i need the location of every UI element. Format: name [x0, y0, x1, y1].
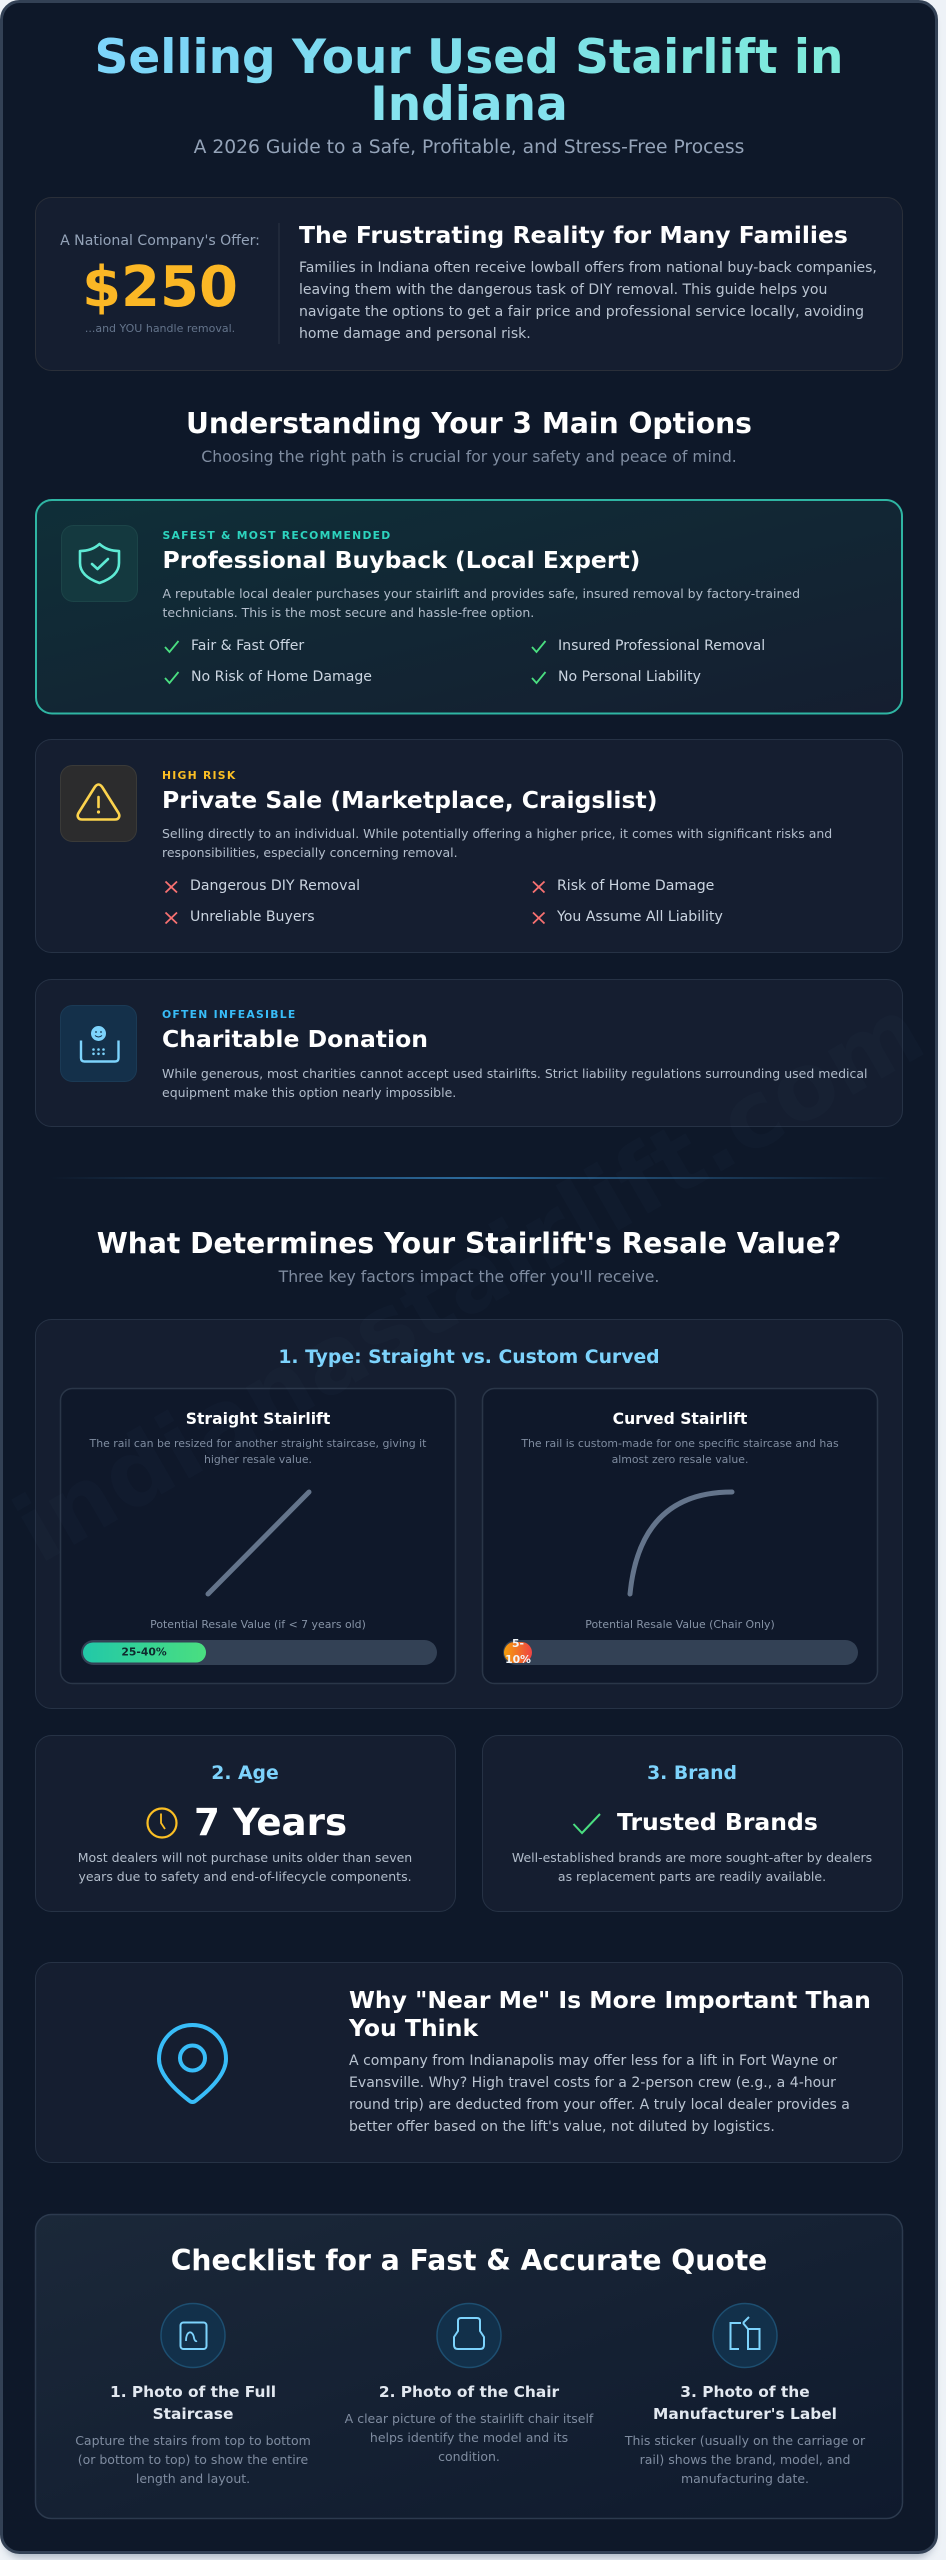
- panel: charitable donation: equipment make this option nearly impossible.: [162, 1085, 456, 1100]
- curved rail: [630, 1492, 732, 1594]
- heading: resale value: Three key factors impact the offer you'll receive.: [278, 1267, 659, 1286]
- checklist item 3: [624, 2304, 866, 2486]
- checklist item 1: (or bottom to top) to show the entire: [78, 2452, 309, 2467]
- heading: resale value: [97, 1227, 841, 1286]
- panel: professional buyback: SAFEST & MOST RECOMMENDED: [162, 529, 392, 542]
- intro body: Families in Indiana often receive lowball offers from national buy-back companies,: [299, 260, 877, 276]
- card: curved stairlift: [482, 1388, 878, 1684]
- checklist item 3: This sticker (usually on the carriage or: [624, 2433, 866, 2448]
- panel: private sale: Private Sale (Marketplace, Craigslist): [162, 786, 657, 814]
- straight rail: [208, 1492, 309, 1594]
- panel: checklist: Checklist for a Fast & Accurate Quote: [171, 2244, 767, 2277]
- panel: charitable donation: While generous, most charities cannot accept used stairlifts. Strict liability regulations surrounding used medical: [162, 1066, 868, 1081]
- checklist item 3: Manufacturer's Label: [653, 2405, 837, 2423]
- panel: professional buyback: A reputable local dealer purchases your stairlift and provides safe, insured removal by factory-trained: [162, 586, 800, 601]
- panel: age: 2. Age: [211, 1763, 279, 1784]
- intro heading: The Frustrating Reality for Many Families: [299, 221, 848, 249]
- checklist item 2: 2. Photo of the Chair: [379, 2383, 560, 2401]
- checklist item 2: A clear picture of the stairlift chair itself: [345, 2411, 594, 2426]
- checklist item 1: length and layout.: [136, 2471, 250, 2486]
- title: Selling Your Used Stairlift in: [95, 30, 843, 85]
- title: Indiana: [370, 77, 568, 132]
- value bar 25-40%: 25-40%: [121, 1646, 167, 1658]
- panel: near me: You Think: [348, 2014, 479, 2042]
- checklist item 2: [345, 2304, 594, 2464]
- national offer: ...and YOU handle removal.: [85, 322, 235, 335]
- heading: options: [186, 407, 752, 466]
- intro body: leaving them with the dangerous task of DIY removal. This guide helps you: [299, 282, 827, 298]
- checklist item 1: [75, 2304, 311, 2486]
- icon: shield: [62, 526, 138, 602]
- icon: label photo: [713, 2304, 777, 2368]
- intro body: [299, 260, 877, 342]
- risks list: Dangerous DIY Removal: [190, 878, 360, 894]
- intro body: navigate the options to get a fair price and professional service locally, avoiding: [299, 304, 864, 320]
- icon: donation: [60, 1006, 136, 1082]
- checklist item 2: helps identify the model and its: [370, 2430, 568, 2445]
- panel: age: Most dealers will not purchase units older than seven: [78, 1850, 412, 1865]
- value bar 5-10%: [503, 1637, 858, 1666]
- panel: brand: 3. Brand: [647, 1763, 737, 1784]
- panel: professional buyback: technicians. This is the most secure and hassle-free option.: [162, 605, 534, 620]
- icon: warning: [60, 766, 136, 842]
- panel: age: years due to safety and end-of-lifecycle components.: [78, 1869, 412, 1884]
- panel: brand: as replacement parts are readily available.: [558, 1869, 826, 1884]
- panel: charitable donation: [36, 980, 902, 1126]
- benefits list: Insured Professional Removal: [558, 638, 765, 654]
- heading: options: Understanding Your 3 Main Options: [186, 407, 752, 440]
- benefits list: No Risk of Home Damage: [191, 669, 372, 685]
- national offer: A National Company's Offer:: [60, 233, 260, 249]
- icon: clock: [148, 1808, 176, 1838]
- benefits list: No Personal Liability: [558, 669, 701, 685]
- checklist item 1: Capture the stairs from top to bottom: [75, 2433, 311, 2448]
- value bar 5-10%: 10%: [505, 1653, 531, 1666]
- national offer: [60, 233, 260, 335]
- panel: charitable donation: OFTEN INFEASIBLE: [162, 1008, 297, 1021]
- panel: near me: better offer based on the lift's value, not diluted by logistics.: [349, 2119, 775, 2135]
- heading: resale value: What Determines Your Stairlift's Resale Value?: [97, 1227, 841, 1260]
- icon: check: [574, 1814, 600, 1833]
- panel: type: 1. Type: Straight vs. Custom Curved: [278, 1347, 660, 1368]
- value bar 5-10%: 5-: [512, 1637, 524, 1650]
- watermark: indianastairlift.com: [0, 976, 941, 1584]
- card: straight stairlift: Potential Resale Value (if < 7 years old): [150, 1618, 366, 1631]
- risks list: Risk of Home Damage: [557, 878, 714, 894]
- card: curved stairlift: almost zero resale value.: [612, 1453, 748, 1466]
- panel: checklist: [36, 2214, 902, 2518]
- panel: brand: Well-established brands are more sought-after by dealers: [512, 1850, 872, 1865]
- panel: brand: Trusted Brands: [617, 1808, 818, 1836]
- icon: chair photo: [437, 2304, 501, 2368]
- checklist item 1: 1. Photo of the Full: [110, 2383, 276, 2401]
- panel: near me: A company from Indianapolis may offer less for a lift in Fort Wayne or: [349, 2053, 837, 2069]
- panel: professional buyback: [36, 500, 902, 714]
- panel: near me: round trip) are deducted from your offer. A truly local dealer provides a: [349, 2097, 850, 2113]
- checklist item 3: rail) shows the brand, model, and: [640, 2452, 850, 2467]
- title: [95, 30, 843, 132]
- intro body: home damage and personal risk.: [299, 326, 531, 342]
- checklist item 1: Staircase: [153, 2405, 233, 2423]
- risks list: You Assume All Liability: [556, 909, 723, 925]
- panel: age: [36, 1736, 456, 1912]
- card: curved stairlift: Potential Resale Value (Chair Only): [585, 1618, 775, 1631]
- panel: private sale: Selling directly to an individual. While potentially offering a higher price, it comes with significant risks and: [162, 826, 832, 841]
- panel: private sale: [36, 740, 902, 952]
- national offer: $250: [82, 255, 238, 320]
- risks list: Unreliable Buyers: [190, 909, 315, 925]
- icon: staircase photo: [161, 2304, 225, 2368]
- checklist item 3: 3. Photo of the: [680, 2383, 810, 2401]
- panel: near me: Why "Near Me" Is More Important Than: [349, 1986, 871, 2014]
- checklist item 2: condition.: [438, 2449, 500, 2464]
- panel: near me: [36, 1962, 902, 2162]
- value bar 25-40%: [81, 1640, 437, 1665]
- checklist item 3: manufacturing date.: [681, 2471, 809, 2486]
- panel: age: 7 Years: [194, 1800, 347, 1844]
- panel: charitable donation: Charitable Donation: [162, 1025, 428, 1053]
- card: curved stairlift: The rail is custom-made for one specific staircase and has: [520, 1437, 839, 1450]
- subtitle: A 2026 Guide to a Safe, Profitable, and Stress-Free Process: [194, 137, 744, 158]
- card: curved stairlift: Curved Stairlift: [613, 1410, 748, 1428]
- risks list: [166, 878, 723, 925]
- panel: private sale: responsibilities, especially concerning removal.: [162, 845, 458, 860]
- card: straight stairlift: higher resale value.: [204, 1453, 312, 1466]
- card: straight stairlift: [60, 1388, 456, 1684]
- card: straight stairlift: The rail can be resized for another straight staircase, giving it: [89, 1437, 427, 1450]
- panel: near me: Evansville. Why? High travel costs for a 2-person crew (e.g., a 4-hour: [349, 2075, 836, 2091]
- panel: private sale: HIGH RISK: [162, 769, 236, 782]
- panel: professional buyback: Professional Buyback (Local Expert): [162, 546, 640, 574]
- benefits list: [165, 638, 765, 685]
- panel: brand: [482, 1736, 902, 1912]
- card: straight stairlift: Straight Stairlift: [186, 1410, 331, 1428]
- icon: location pin: [159, 2025, 226, 2102]
- panel: type: [36, 1320, 902, 1708]
- panel: intro: [36, 198, 902, 370]
- benefits list: Fair & Fast Offer: [191, 638, 304, 654]
- heading: options: Choosing the right path is crucial for your safety and peace of mind.: [201, 447, 737, 466]
